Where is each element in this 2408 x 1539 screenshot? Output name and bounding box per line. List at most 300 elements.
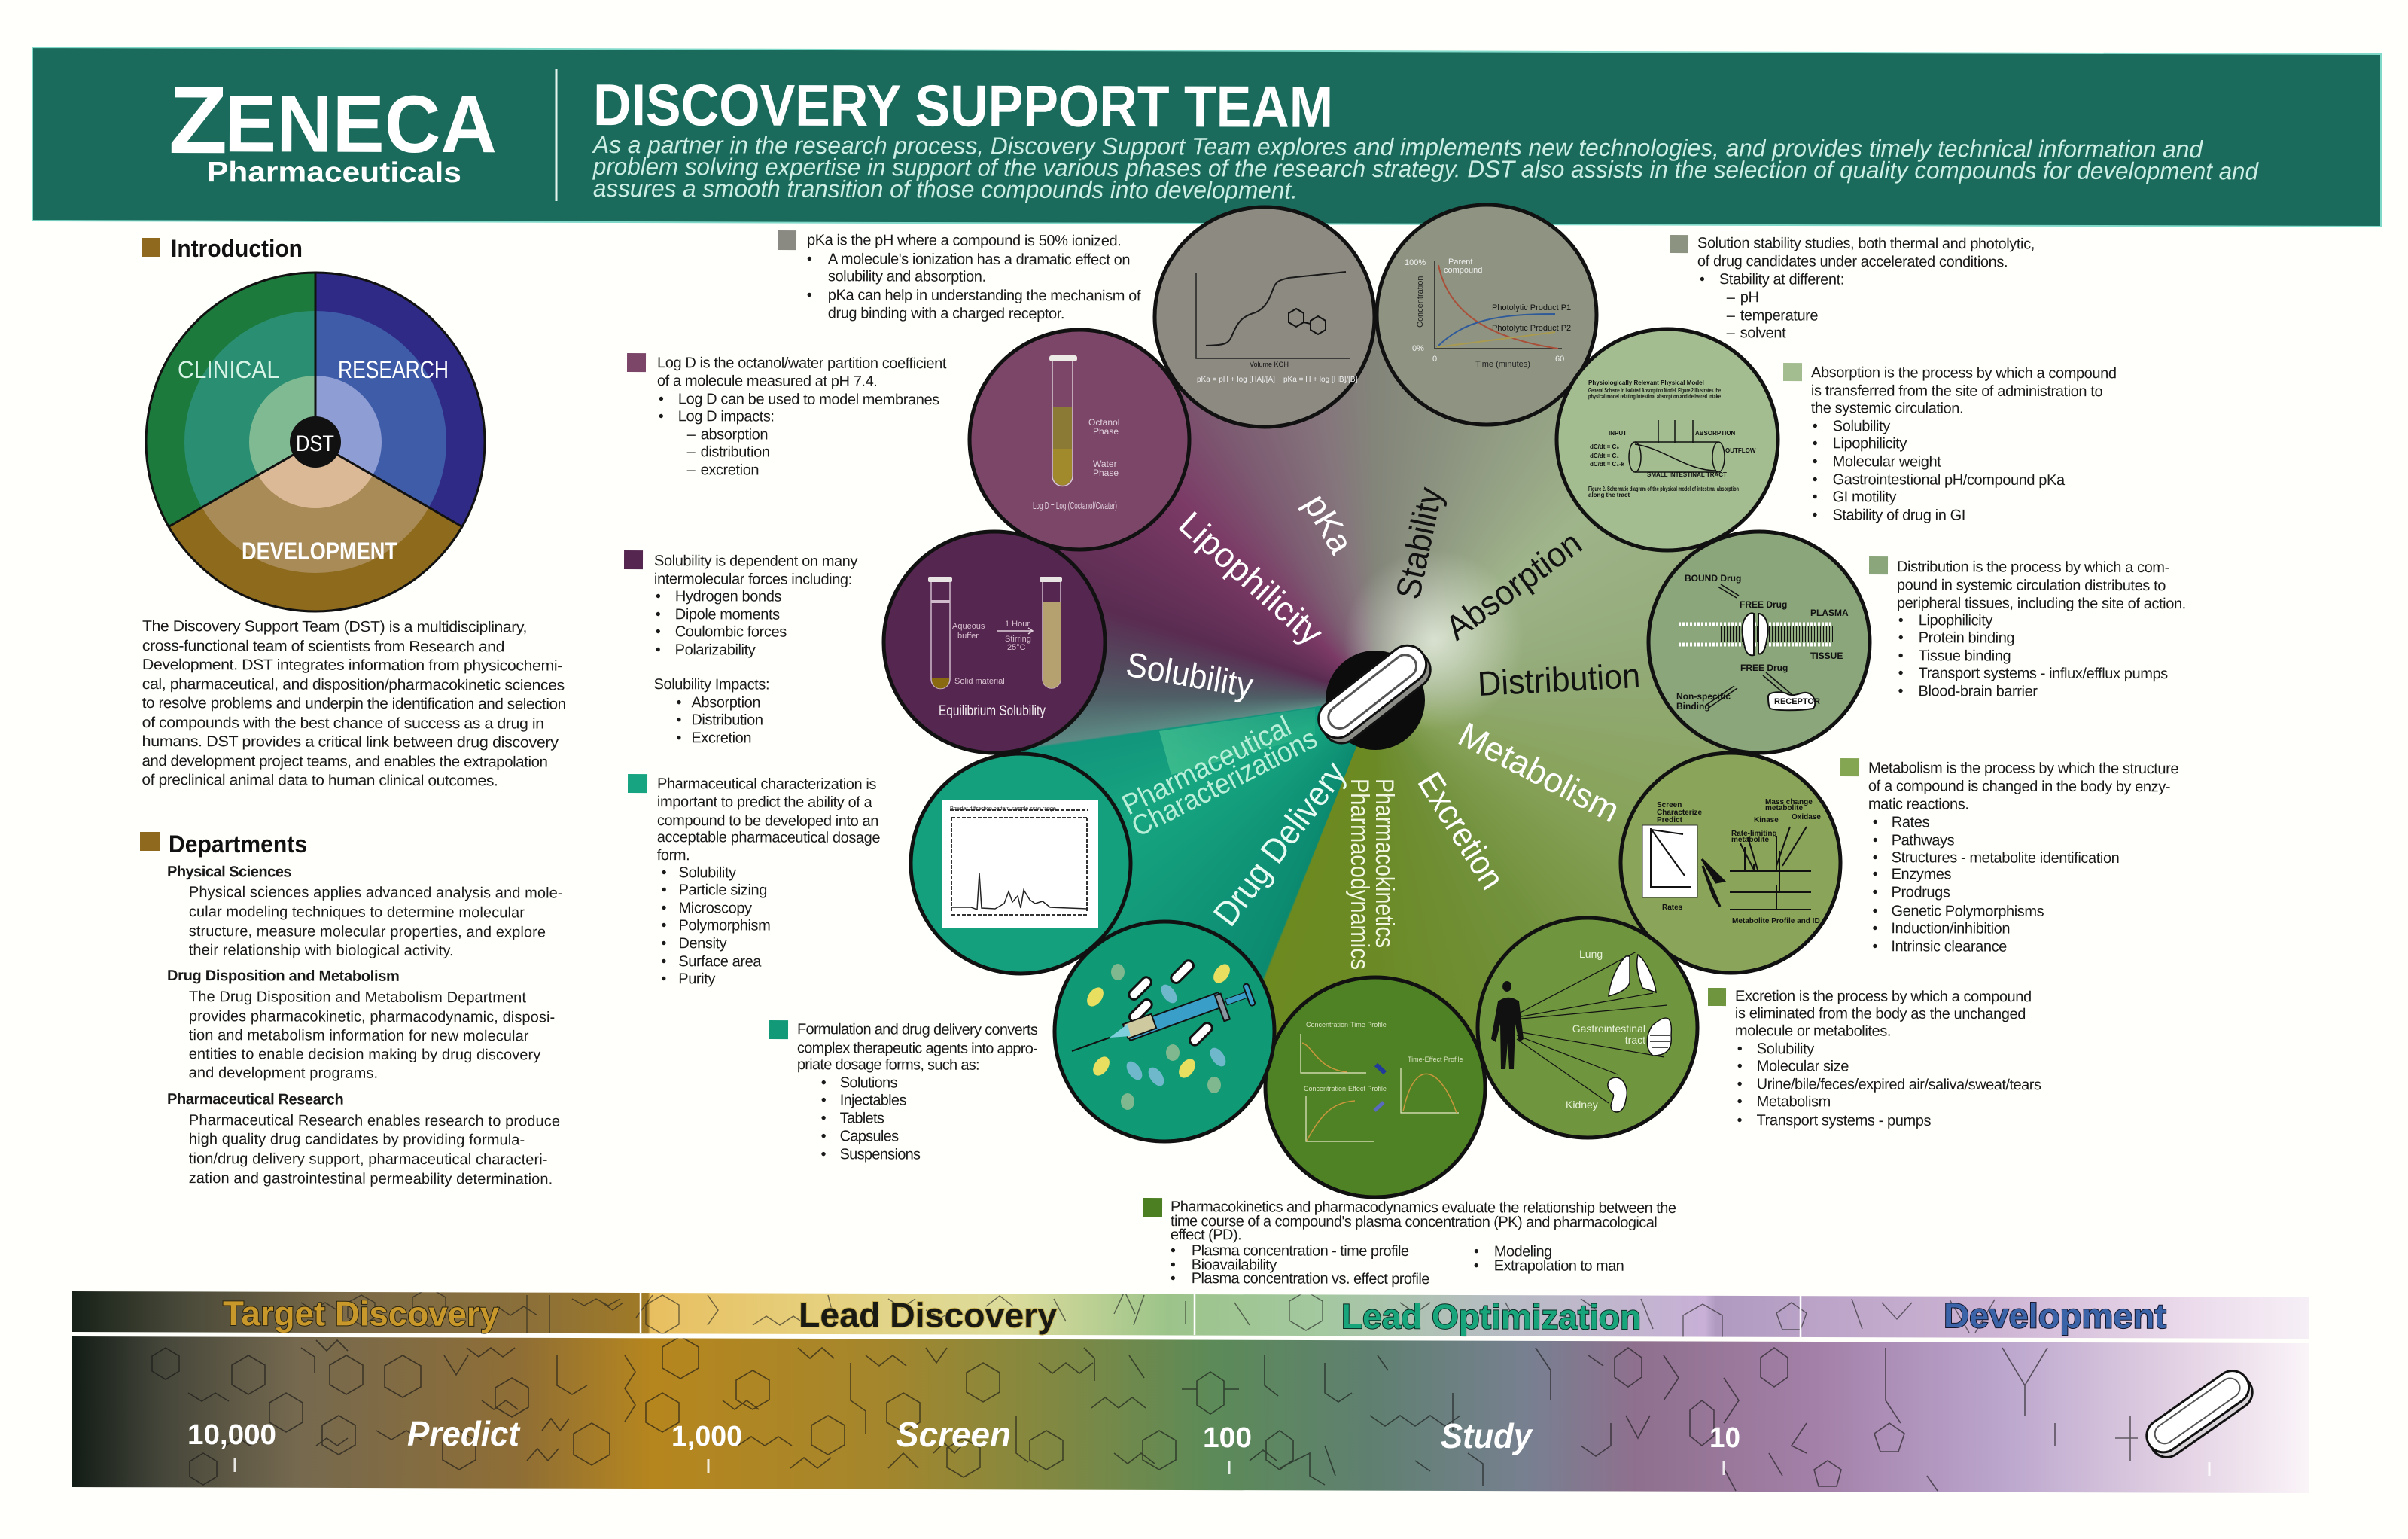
circle: Excretion <box>1478 918 1697 1138</box>
panel: drug pipeline band <box>72 1288 2309 1493</box>
label: Pharmaceutical Characterizations: Characterizations <box>1127 723 1323 843</box>
circle: Distribution: Non-specific <box>1676 691 1731 702</box>
text: introduction paragraph: of compounds with the best chance of success as a drug in <box>142 715 544 733</box>
callout: pKa: drug binding with a charged receptor. <box>828 305 1064 322</box>
circle: Stability: Time (minutes) <box>1475 360 1530 369</box>
callout: Solubility: Solubility Impacts: <box>654 676 769 693</box>
callout: Solubility: • <box>676 712 681 728</box>
callout: Log D: – <box>687 426 696 443</box>
callout: Absorption: • <box>1813 471 1818 488</box>
circle: Metabolism: Screen <box>1657 801 1682 809</box>
circle: Distribution: FREE Drug <box>1740 599 1787 610</box>
icon: heading square <box>140 832 160 851</box>
membrane <box>1679 613 1833 655</box>
callout: Excretion: Molecular size <box>1757 1058 1849 1075</box>
callout: Distribution: Lipophilicity <box>1919 612 1992 629</box>
label: Pharmacokinetics: Pharmacokinetics <box>1370 779 1399 948</box>
callout: Log D: absorption <box>701 426 768 443</box>
callout: Distribution: • <box>1898 629 1904 646</box>
callout: Excretion: • <box>1737 1041 1743 1057</box>
circle: Absorption: Figure 2. Schematic diagram of the physical model of intestinal absorption <box>1588 486 1739 492</box>
callout: Pharmaceutical characterization: • <box>662 882 667 898</box>
callout: Absorption: Molecular weight <box>1833 453 1941 471</box>
circle: Lipophilicity: Phase <box>1093 468 1119 478</box>
labels: activities: Screen <box>896 1415 1011 1454</box>
text: Pharmaceutical Research: Pharmaceutical Research enables research to produce <box>189 1112 560 1130</box>
callout: Solution stability: • <box>1700 271 1705 288</box>
logo: Zeneca Pharmaceuticals: Pharmaceuticals <box>207 157 461 189</box>
callout: Distribution: Protein binding <box>1919 629 2014 647</box>
text: introduction paragraph <box>142 618 566 790</box>
callout: Excretion: • <box>1737 1058 1743 1074</box>
circle: Lipophilicity: Octanol <box>1088 417 1119 428</box>
callout: Pharmaceutical characterization: • <box>661 971 666 987</box>
circle: Excretion: Gastrointestinal <box>1572 1022 1645 1035</box>
callout: Solubility <box>623 550 857 747</box>
callout: Solubility: Solubility is dependent on many <box>654 553 857 570</box>
callout: Absorption: Stability of drug in GI <box>1832 507 1965 524</box>
label: Excretion: Excretion <box>1411 765 1512 896</box>
callout: Absorption: Absorption is the process by which a compound <box>1811 364 2117 382</box>
circle: Solubility: 1 Hour <box>1005 620 1030 629</box>
callout: Distribution: Transport systems - influx/efflux pumps <box>1919 665 2168 682</box>
callout: Solubility: • <box>656 642 661 658</box>
callout: pKa: solubility and absorption. <box>828 268 986 285</box>
labels: activities <box>407 1414 1533 1455</box>
circle: Stability: Parent <box>1448 258 1472 267</box>
pie chart: DST organisation: DEVELOPMENT <box>242 538 397 565</box>
circle: Distribution: TISSUE <box>1810 651 1843 661</box>
callout: Pharmacokinetics and pharmacodynamics: • <box>1474 1243 1479 1260</box>
text: Drug Disposition and Metabolism: The Drug Disposition and Metabolism Department <box>189 989 526 1006</box>
circle: Solubility <box>884 532 1105 753</box>
callout: Formulation and drug delivery: priate dosage forms, such as: <box>797 1056 979 1074</box>
callout: Formulation and drug delivery: Formulation and drug delivery converts <box>797 1021 1038 1038</box>
callout: Solubility: • <box>676 730 681 746</box>
callout: Pharmaceutical characterization: Polymorphism <box>678 917 770 934</box>
circle: Solubility: Stirring <box>1005 635 1031 644</box>
callout: Metabolism: • <box>1873 849 1878 866</box>
callout: Solution stability: Stability at different: <box>1719 271 1844 288</box>
callout: Pharmacokinetics and pharmacodynamics: Extrapolation to man <box>1494 1257 1624 1275</box>
callout: Pharmaceutical characterization: Density <box>678 935 727 952</box>
icon: intestines <box>1647 1018 1671 1056</box>
callout: Pharmaceutical characterization: compound to be developed into an <box>657 812 878 830</box>
callout: Distribution: pound in systemic circulation distributes to <box>1897 577 2166 594</box>
callout: Pharmaceutical characterization: important to predict the ability of a <box>657 794 873 811</box>
label: Distribution: Distribution <box>1477 656 1641 703</box>
pie chart: DST organisation: RESEARCH <box>338 356 449 383</box>
callout: Solution stability: pH <box>1740 289 1759 306</box>
callout: Pharmaceutical characterization: • <box>661 953 666 970</box>
text: introduction paragraph: The Discovery Support Team (DST) is a multidisciplinary, <box>142 618 527 635</box>
callout: Log D: of a molecule measured at pH 7.4. <box>657 373 878 390</box>
icon: capsule in band <box>2140 1364 2259 1464</box>
callout: Pharmacokinetics and pharmacodynamics: • <box>1171 1270 1176 1287</box>
callout: Absorption: Gastrointestional pH/compound pKa <box>1833 471 2066 489</box>
circle: Stability: Photolytic Product P2 <box>1492 324 1571 333</box>
callout: Pharmaceutical characterization: • <box>661 917 667 934</box>
logo: Zeneca Pharmaceuticals: Z <box>169 66 227 174</box>
callout: Formulation and drug delivery: • <box>821 1146 827 1163</box>
callout: Excretion <box>1708 988 2041 1129</box>
callout: Metabolism: • <box>1873 866 1878 882</box>
circle: Metabolism: Rate-limiting <box>1731 830 1777 838</box>
circle: Absorption: dC/dt = C₀-k <box>1590 461 1625 468</box>
circle: Stability: 100% <box>1405 258 1426 267</box>
heading: Introduction: Introduction <box>171 235 303 262</box>
callout: Pharmaceutical characterization: Purity <box>678 971 715 987</box>
icon: syringe <box>1072 983 1256 1051</box>
subtitle paragraph: As a partner in the research process, Discovery Support Team explores and implements new technologies, and provides timely technical information and <box>592 131 2203 163</box>
callout: pKa: A molecule's ionization has a dramatic effect on <box>828 251 1130 268</box>
callout: Pharmaceutical characterization: Surface area <box>678 953 762 971</box>
circle: Metabolism <box>1621 753 1840 973</box>
label: Pharmaceutical Characterizations: Pharmaceutical <box>1117 711 1296 821</box>
text: Drug Disposition and Metabolism: Drug Disposition and Metabolism <box>167 968 400 985</box>
circle: Metabolism: Mass change <box>1765 798 1813 806</box>
logo: Zeneca Pharmaceuticals: ENECA <box>224 78 497 169</box>
circle: pKa: pKa = pH + log [HA]/[A] <box>1197 376 1275 384</box>
callout: pKa: pKa is the pH where a compound is 50% ionized. <box>807 232 1121 249</box>
callout: Excretion: Urine/bile/feces/expired air/saliva/sweat/tears <box>1757 1076 2041 1093</box>
text: Physical Sciences: structure, measure molecular properties, and explore <box>189 923 546 940</box>
callout: Pharmacokinetics and pharmacodynamics: effect (PD). <box>1171 1227 1241 1243</box>
callout: Solubility: Polarizability <box>675 642 756 659</box>
circle: Stability: Photolytic Product P1 <box>1492 303 1571 312</box>
circle: Stability <box>1377 205 1597 425</box>
band: stage strip <box>72 1291 2309 1339</box>
label: Drug Delivery: Drug Delivery <box>1205 754 1353 933</box>
text: Physical Sciences: their relationship with biological activity. <box>189 942 454 959</box>
circle: Absorption <box>1557 329 1778 550</box>
callout: Metabolism: • <box>1873 832 1878 849</box>
circle: Excretion: Lung <box>1579 948 1603 960</box>
callout: Excretion: Excretion is the process by which a compound <box>1735 988 2032 1005</box>
callout: Pharmaceutical characterization: Microscopy <box>679 900 752 916</box>
labels: stages: Lead Discovery <box>799 1295 1058 1335</box>
circle: Metabolism: metabolite <box>1765 804 1803 812</box>
callout: Solution stability <box>1670 235 2035 342</box>
circle: Absorption: OUTFLOW <box>1725 447 1756 454</box>
icon: kidney <box>1608 1077 1627 1112</box>
labels: stages: Target Discovery <box>223 1294 500 1333</box>
callout: Solubility: Distribution <box>691 712 763 729</box>
circle: pKa: Volume KOH <box>1250 361 1289 368</box>
callout: Metabolism: Intrinsic clearance <box>1891 938 2007 955</box>
text: Pharmaceutical Research: zation and gastrointestinal permeability determination. <box>189 1170 553 1187</box>
callout: Solubility: Dipole moments <box>675 606 780 623</box>
dividers: stage boundaries <box>641 1292 1801 1337</box>
circle: Pharmaceutical Characterizations <box>911 754 1131 974</box>
pattern: chemical structures, main strip <box>152 1336 2138 1491</box>
text: Physical Sciences: Physical Sciences <box>167 864 291 880</box>
text: Pharmaceutical Research: tion/drug delivery support, pharmaceutical characteri- <box>189 1150 548 1168</box>
label: Solubility: Solubility <box>1123 645 1256 705</box>
callout: Distribution: Tissue binding <box>1919 648 2011 665</box>
callout: Formulation and drug delivery: • <box>821 1128 827 1144</box>
circle: pKa <box>1155 207 1374 427</box>
text: introduction paragraph: cal, pharmaceutical, and disposition/pharmacokinetic sciences <box>142 676 565 694</box>
subtitle paragraph: assures a smooth transition of those compounds into development. <box>593 175 1298 204</box>
circle: Lipophilicity: Phase <box>1093 426 1119 437</box>
callout: Metabolism: Structures - metabolite identification <box>1892 849 2119 867</box>
callout: Log D: excretion <box>701 462 759 479</box>
callout: Pharmaceutical characterization: acceptable pharmaceutical dosage <box>657 829 880 846</box>
circle: Distribution: BOUND Drug <box>1685 573 1741 584</box>
callout: Metabolism: Induction/inhibition <box>1891 920 2010 937</box>
callout: Absorption: • <box>1813 489 1818 505</box>
labels: activities: Predict <box>407 1414 521 1453</box>
circle: Distribution <box>1648 532 1870 753</box>
circle: Stability: 0 <box>1432 355 1437 364</box>
callout: Metabolism: Prodrugs <box>1892 884 1950 901</box>
text: introduction paragraph: of preclinical animal data to human clinical outcomes. <box>142 772 498 789</box>
callout: Pharmacokinetics and pharmacodynamics: • <box>1171 1242 1176 1259</box>
callout: Formulation and drug delivery: Capsules <box>840 1128 899 1144</box>
callout: Metabolism: • <box>1872 920 1877 937</box>
circle: Pharmaceutical Characterizations: Powder diffraction pattern sample scan range <box>950 806 1056 812</box>
circle: Metabolism: Metabolite Profile and ID <box>1732 917 1820 925</box>
callout: Metabolism: of a compound is changed in the body by enzy- <box>1868 778 2170 795</box>
callout: Pharmaceutical characterization: • <box>661 935 666 952</box>
callout: Excretion: • <box>1737 1076 1743 1093</box>
icon: test tube before <box>928 577 952 689</box>
callout: Distribution <box>1869 556 2186 700</box>
callout: Log D: distribution <box>701 443 770 461</box>
callout: Formulation and drug delivery: • <box>821 1110 827 1126</box>
callout: Pharmacokinetics and pharmacodynamics: • <box>1474 1257 1479 1274</box>
callout: Formulation and drug delivery: complex therapeutic agents into appro- <box>797 1040 1037 1057</box>
label: Lipophilicity: Lipophilicity <box>1171 504 1331 653</box>
label: pKa: pKa <box>1296 487 1362 560</box>
callout: Absorption: is transferred from the site of administration to <box>1811 382 2102 400</box>
circle: Metabolism: Characterize <box>1657 809 1702 817</box>
callout: Solubility: • <box>676 694 682 711</box>
callout: Formulation and drug delivery: Solutions <box>840 1074 898 1091</box>
callout: Log D: – <box>687 443 696 460</box>
callout: Solubility: Excretion <box>691 730 751 746</box>
text: Physical Sciences: cular modeling techniques to determine molecular <box>189 904 525 921</box>
circle: Stability: 60 <box>1555 355 1564 364</box>
text: introduction paragraph: cross-functional team of scientists from Research and <box>142 638 504 655</box>
pie chart: DST organisation <box>146 273 485 611</box>
callout: Metabolism: • <box>1872 903 1878 919</box>
circle: Solubility: 25°C <box>1007 643 1026 652</box>
text: Pharmaceutical Research <box>167 1091 560 1188</box>
text: Pharmaceutical Research: Pharmaceutical Research <box>167 1091 343 1108</box>
subtitle paragraph: problem solving expertise in support of the various phases of the research strategy. DST also assists in the selection of quality compounds for development and <box>592 153 2259 184</box>
callout: Log D: Log D is the octanol/water partition coefficient <box>657 355 947 372</box>
circle: Metabolism: Rates <box>1662 904 1683 912</box>
callout: Absorption: Lipophilicity <box>1833 435 1907 452</box>
circle: Distribution: FREE Drug <box>1740 663 1788 673</box>
callout: Distribution: Blood-brain barrier <box>1919 683 2038 700</box>
circle: Absorption: dC/dt = C₀ <box>1590 443 1619 450</box>
label: Pharmacodynamics: Pharmacodynamics <box>1345 779 1374 970</box>
pie chart: DST organisation: DST <box>296 431 334 456</box>
callout: Solubility: • <box>656 623 661 640</box>
callout: Pharmaceutical characterization: • <box>662 900 667 916</box>
fan highlight: light wedges <box>1159 550 1524 775</box>
labels: compound counts <box>187 1419 1740 1454</box>
circle: Pharmacokinetics and Pharmacodynamics: Concentration-Effect Profile <box>1304 1085 1387 1093</box>
callout: Pharmacokinetics and pharmacodynamics: time course of a compound's plasma concentration (PK) and pharmacological <box>1171 1213 1657 1231</box>
text: Drug Disposition and Metabolism <box>167 968 555 1082</box>
callout: Absorption: GI motility <box>1833 489 1896 505</box>
circle: Solubility: Aqueous <box>952 622 985 631</box>
callout: Excretion: • <box>1737 1112 1743 1129</box>
callout: Solution stability: – <box>1727 307 1736 324</box>
text: Drug Disposition and Metabolism: provides pharmacokinetic, pharmacodynamic, disposi- <box>189 1008 555 1025</box>
callout: Absorption: • <box>1813 418 1818 434</box>
label: Absorption: Absorption <box>1438 523 1589 648</box>
callout: Metabolism: Pathways <box>1892 832 1955 849</box>
circle: Lipophilicity: Log D = Log (Coctanol/Cwater) <box>1033 500 1117 511</box>
callout: Log D: – <box>687 462 696 478</box>
callout: Solubility: Absorption <box>691 694 760 712</box>
callout: Log D: • <box>659 391 664 407</box>
logo: Zeneca Pharmaceuticals <box>169 66 497 189</box>
icon: test tube after <box>1040 577 1062 688</box>
labels: compound counts: 10 <box>1709 1422 1740 1454</box>
labels: compound counts: 1,000 <box>671 1421 742 1452</box>
icon: human body <box>1491 981 1524 1069</box>
callout: Log D <box>627 353 947 479</box>
text: Drug Disposition and Metabolism: tion and metabolism information for new molecular <box>189 1027 529 1044</box>
callout: Absorption: Solubility <box>1833 418 1890 434</box>
callout: Solution stability: temperature <box>1740 307 1818 325</box>
callout: Solution stability: – <box>1727 325 1736 341</box>
callout: Pharmacokinetics and pharmacodynamics: Modeling <box>1494 1243 1552 1260</box>
callout: Excretion: molecule or metabolites. <box>1735 1022 1891 1040</box>
circle: Metabolism: Oxidase <box>1792 813 1821 821</box>
callout: Solution stability: – <box>1727 289 1736 306</box>
callout: Solubility: • <box>656 606 661 623</box>
circle: Absorption: Physiologically Relevant Physical Model <box>1588 379 1704 386</box>
callout: Solubility: Coulombic forces <box>675 623 787 641</box>
labels: compound counts: 100 <box>1203 1422 1252 1454</box>
circle: Excretion: tract <box>1625 1034 1645 1046</box>
circle: Excretion: Kidney <box>1566 1099 1598 1111</box>
callout: Solution stability: solvent <box>1740 325 1786 341</box>
text: introduction paragraph: and development project teams, and enables the extrapolation <box>142 753 548 771</box>
circle: Pharmacokinetics and Pharmacodynamics: Time-Effect Profile <box>1408 1056 1463 1063</box>
panel: Departments <box>140 830 563 1188</box>
callout: Absorption: • <box>1812 507 1818 523</box>
callout: Distribution: peripheral tissues, including the site of action. <box>1897 595 2186 612</box>
callout: Log D: • <box>659 408 664 425</box>
callout: Pharmaceutical characterization: Pharmaceutical characterization is <box>657 776 876 793</box>
circle: Absorption: SMALL INTESTINAL TRACT <box>1647 471 1727 478</box>
callout: Metabolism: • <box>1873 814 1878 830</box>
callout: Distribution: • <box>1898 665 1904 681</box>
callout: pKa: • <box>807 287 812 303</box>
title: DISCOVERY SUPPORT TEAM <box>593 72 1333 140</box>
callout: Metabolism: Genetic Polymorphisms <box>1891 903 2044 920</box>
callout: Absorption: • <box>1813 453 1818 470</box>
callout: Pharmacokinetics and pharmacodynamics: • <box>1171 1257 1176 1273</box>
circle: pKa: pKa = H + log [HB]/[B] <box>1283 376 1358 384</box>
callout: Pharmacokinetics and pharmacodynamics: Bioavailability <box>1192 1257 1277 1274</box>
icon: lungs <box>1609 955 1656 996</box>
circle: Metabolism: metabolite <box>1731 836 1769 844</box>
circle: Solubility: buffer <box>957 632 979 641</box>
callout: Absorption: the systemic circulation. <box>1811 400 1963 417</box>
callout: Metabolism: matic reactions. <box>1868 796 1969 812</box>
callout: Metabolism: Rates <box>1892 814 1929 830</box>
callout: Absorption <box>1782 363 2117 524</box>
callout: Distribution: • <box>1898 612 1904 629</box>
pattern: chemical structures, stage strip <box>301 1292 1995 1337</box>
label: Stability: Stability <box>1388 484 1450 602</box>
callout: Metabolism: Enzymes <box>1892 866 1951 882</box>
icon: heading square <box>142 238 160 257</box>
callout: Formulation and drug delivery: • <box>821 1092 827 1108</box>
circle: Stability: compound <box>1444 266 1482 275</box>
circle: Lipophilicity <box>970 330 1189 550</box>
labels: stages: Development <box>1944 1296 2166 1336</box>
callout: Solution stability: of drug candidates under accelerated conditions. <box>1697 253 2008 270</box>
circle: Distribution: PLASMA <box>1810 608 1849 618</box>
callout: pKa: • <box>807 251 812 267</box>
panel: Introduction <box>142 235 566 790</box>
label: Metabolism: Metabolism <box>1452 715 1626 830</box>
callout: Metabolism <box>1840 758 2178 955</box>
pie chart: DST organisation: CLINICAL <box>178 356 279 383</box>
circle: Metabolism: Kinase <box>1754 816 1779 824</box>
circle: Absorption: ABSORPTION <box>1695 430 1736 437</box>
band: compound funnel strip <box>72 1336 2309 1493</box>
callout: Pharmaceutical characterization: Solubility <box>679 864 736 881</box>
labels: stages <box>223 1294 2166 1336</box>
circle: Metabolism: Predict <box>1657 816 1683 824</box>
callout: Pharmacokinetics and pharmacodynamics: Plasma concentration - time profile <box>1192 1242 1409 1260</box>
circle: Pharmacokinetics and Pharmacodynamics: Concentration-Time Profile <box>1306 1021 1387 1029</box>
circle: Distribution: RECEPTOR <box>1774 697 1820 706</box>
callout: Distribution: • <box>1898 648 1904 664</box>
circle: Absorption: General Scheme in Isolated Absorption Model. Figure 2 illustrates the <box>1588 387 1721 394</box>
callout: Excretion: is eliminated from the body as the unchanged <box>1735 1005 2026 1022</box>
labels: compound counts: 10,000 <box>187 1419 276 1451</box>
callout: pKa <box>778 230 1141 322</box>
callout: Metabolism: • <box>1872 938 1877 955</box>
callout: Absorption: • <box>1813 435 1818 452</box>
callout: Solubility: intermolecular forces including: <box>654 571 852 588</box>
text: introduction paragraph: humans. DST provides a critical link between drug discovery <box>142 733 559 751</box>
callout: Metabolism: • <box>1873 884 1878 901</box>
callout: Metabolism: Metabolism is the process by which the structure <box>1868 760 2178 777</box>
labels: stages: Lead Optimization <box>1341 1297 1641 1336</box>
callout: Pharmaceutical characterization <box>627 774 881 988</box>
callout: Distribution: • <box>1898 683 1904 699</box>
tablets <box>1084 958 1233 1110</box>
callout: Pharmacokinetics and pharmacodynamics <box>1143 1198 1676 1288</box>
circle: Pharmacokinetics and Pharmacodynamics <box>1265 977 1485 1197</box>
text: Pharmaceutical Research: high quality drug candidates by providing formula- <box>189 1131 525 1148</box>
callout: Pharmacokinetics and pharmacodynamics: Plasma concentration vs. effect profile <box>1192 1270 1429 1288</box>
callout: Pharmaceutical characterization: • <box>662 864 667 881</box>
text: introduction paragraph: to resolve problems and underpin the identification and selection <box>142 695 566 713</box>
callout: Formulation and drug delivery: • <box>821 1074 827 1091</box>
callout: Formulation and drug delivery: Suspensions <box>840 1146 921 1163</box>
callout: Solubility: Hydrogen bonds <box>675 588 781 605</box>
text: Drug Disposition and Metabolism: and development programs. <box>189 1065 378 1082</box>
callout: Excretion: Solubility <box>1757 1041 1814 1057</box>
callout: Log D: Log D can be used to model membranes <box>678 391 939 408</box>
callout: pKa: pKa can help in understanding the mechanism of <box>828 287 1141 304</box>
heading: Departments: Departments <box>169 830 307 858</box>
